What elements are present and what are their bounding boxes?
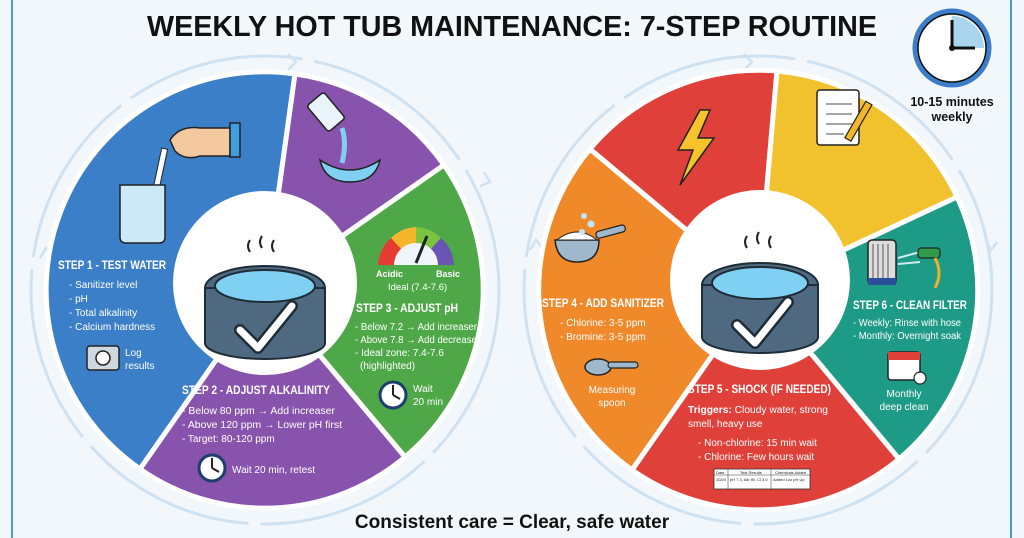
icon: lightning <box>678 110 714 185</box>
text: step 5: - Non-chlorine: 15 min wait <box>698 438 817 449</box>
panel: step 1 test water (blue) <box>46 72 295 469</box>
text: step 1 <box>58 258 166 333</box>
text: step 2: - Above 120 ppm → Lower pH first <box>182 420 342 431</box>
icon: notepad and pencil <box>817 90 872 145</box>
text: step 5: - Chlorine: Few hours wait <box>698 452 814 463</box>
text: step 2: Wait 20 min, retest <box>232 465 315 476</box>
panel: yellow (log) <box>758 71 957 290</box>
footer caption: Consistent care = Clear, safe water <box>355 512 670 533</box>
text: step 5: Triggers: Cloudy water, strong <box>688 405 828 416</box>
icon: measuring spoon: spoon <box>598 398 626 409</box>
text: step 1: STEP 1 - TEST WATER <box>58 258 166 272</box>
text: step 5: smell, heavy use <box>688 419 763 430</box>
table: log: 10/20 <box>716 477 727 482</box>
panel: top red (lightning) <box>590 70 777 290</box>
icon: calendar monthly deep clean: deep clean <box>880 402 928 413</box>
text: step 3: (highlighted) <box>360 361 415 372</box>
icon: pH gauge: Ideal (7.4-7.6) <box>388 282 447 293</box>
text: step 3: 20 min <box>413 397 443 408</box>
icon: pH gauge: Acidic <box>376 269 403 279</box>
icon: clock 10-15 minutes: 10-15 minutes <box>910 95 994 109</box>
text: step 1: - Sanitizer level <box>69 280 137 291</box>
icon: calendar monthly deep clean: Monthly <box>886 389 922 400</box>
text: step 3 <box>355 301 481 408</box>
icon: bottle pouring <box>307 92 380 182</box>
text: step 1: - Total alkalinity <box>69 308 137 319</box>
right wheel <box>539 70 978 510</box>
text: step 3: - Above 7.8 → Add decreaser <box>355 335 481 346</box>
ring arrows: right <box>524 54 997 524</box>
left center tub <box>173 191 357 375</box>
table: log: Chemicals Added <box>775 470 806 475</box>
text: step 3: STEP 3 - ADJUST pH <box>356 301 458 315</box>
icon: measuring spoon: Measuring <box>589 385 635 396</box>
text: step 2: STEP 2 - ADJUST ALKALINITY <box>182 383 330 397</box>
text: step 3: - Below 7.2 → Add increaser <box>355 322 478 333</box>
title: WEEKLY HOT TUB MAINTENANCE: 7-STEP ROUTINE <box>147 11 877 43</box>
panel: step 4 add sanitizer (orange) <box>539 149 758 470</box>
panel: step 6 clean filter (teal) <box>758 197 978 459</box>
text: step 5: STEP 5 - SHOCK (IF NEEDED) <box>688 382 831 396</box>
table: log <box>714 469 810 489</box>
icon: scoop with powder <box>555 213 626 262</box>
text: step 2 <box>182 383 342 481</box>
icon: camera log results <box>87 346 154 372</box>
text: step 2: - Target: 80-120 ppm <box>182 434 275 445</box>
text: step 2: - Below 80 ppm → Add increaser <box>182 406 336 417</box>
table: log: Date <box>716 470 725 475</box>
right center tub <box>670 190 850 370</box>
icon: hand with test strip and beaker <box>120 123 240 243</box>
icon: clock 10-15 minutes <box>910 11 994 124</box>
text: step 6 <box>853 298 967 342</box>
text: step 1: - Calcium hardness <box>69 322 155 333</box>
panel: step 2 adjust alkalinity (purple) <box>140 290 405 508</box>
text: step 1: - pH <box>69 294 88 305</box>
text: step 4 <box>542 296 664 343</box>
text: step 4: - Bromine: 3-5 ppm <box>560 332 646 343</box>
text: step 5 <box>688 382 831 463</box>
text: step 4: - Chlorine: 3-5 ppm <box>560 318 646 329</box>
text: step 3: Wait <box>413 384 433 395</box>
icon: pH gauge: Basic <box>436 269 460 279</box>
panel: top purple (pour) <box>265 74 444 290</box>
icon: calendar monthly deep clean <box>880 352 928 413</box>
text: step 6: STEP 6 - CLEAN FILTER <box>853 298 967 312</box>
icon: camera log results: Log <box>125 348 142 359</box>
text: step 6: - Monthly: Overnight soak <box>853 331 962 342</box>
icon: clock 10-15 minutes: weekly <box>930 110 973 124</box>
table: log: pH 7.3, Alk 90, Cl 3.0 <box>730 477 768 482</box>
left wheel <box>46 72 483 508</box>
icon: measuring spoon <box>585 359 638 409</box>
ring arrows: left <box>31 54 499 524</box>
panel: step 5 shock (red) <box>632 290 899 510</box>
panel: step 3 adjust pH (green) <box>265 165 483 457</box>
table: log: Added 1oz pH Up <box>773 477 805 482</box>
icon: camera log results: results <box>125 361 154 372</box>
text: step 4: STEP 4 - ADD SANITIZER <box>542 296 664 310</box>
text: step 3: - Ideal zone: 7.4-7.6 <box>355 348 444 359</box>
table: log: Test Results <box>740 470 762 475</box>
text: step 6: - Weekly: Rinse with hose <box>853 318 961 329</box>
icon: pH gauge <box>376 227 460 293</box>
icon: filter and hose <box>868 240 940 288</box>
